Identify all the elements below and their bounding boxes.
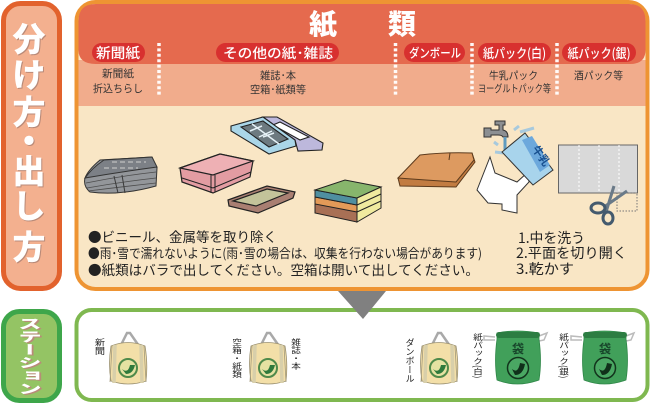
instructions	[88, 226, 482, 279]
illustration: bundled newspapers	[85, 157, 157, 193]
category: newspaper: 新聞紙	[96, 43, 140, 63]
illustration: divided box and lid	[231, 117, 323, 154]
category: newspaper: 折込ちらし	[93, 81, 143, 96]
bag: white cartons	[471, 331, 547, 384]
left pill: sorting and disposal heading: し	[12, 180, 46, 228]
bag: silver cartons: 紙パック(銀)	[557, 332, 571, 378]
illustration: pink box	[180, 154, 253, 193]
left pill: sorting and disposal heading: 方	[12, 221, 46, 269]
left pill: sorting and disposal heading: 出	[12, 145, 46, 193]
sack: newspaper: 新聞	[92, 338, 108, 356]
illustration: tap and milk carton: 牛乳	[529, 143, 553, 169]
title	[309, 3, 416, 43]
category: white cartons	[478, 43, 551, 96]
sack: cardboard	[404, 333, 458, 384]
instructions: ●ビニール、金属等を取り除く	[88, 226, 277, 246]
category: other paper and magazines: その他の紙･雑誌	[223, 42, 334, 62]
title: 紙	[309, 3, 337, 43]
sack: cardboard: ダンボール	[404, 337, 416, 383]
left pill: sorting and disposal heading: ・	[12, 115, 46, 163]
category: newspaper	[92, 43, 145, 96]
sack: newspaper	[92, 333, 147, 384]
category: silver cartons: 酒パック等	[574, 68, 623, 83]
carton steps: 1.中を洗う	[518, 228, 585, 248]
panel: station	[76, 310, 648, 400]
illustration: tap and milk carton	[477, 121, 553, 213]
carton steps	[516, 228, 627, 279]
instructions: ●雨･雪で濡れないように(雨･雪の場合は、収集を行わない場合があります)	[88, 243, 482, 262]
category: other paper and magazines: 空箱･紙類等	[250, 82, 306, 97]
illustration: stacked books	[315, 180, 381, 222]
carton steps: 2.平面を切り開く	[516, 243, 627, 263]
category: cardboard: ダンボール	[409, 42, 461, 62]
illustration: flattened cardboard	[398, 153, 475, 187]
category: other paper and magazines: 雑誌･本	[260, 68, 296, 83]
bag: silver cartons	[557, 331, 634, 384]
category: white cartons: 紙パック(白)	[483, 43, 546, 62]
sack: magazines and boxes	[230, 333, 303, 384]
title: 類	[388, 3, 416, 43]
instructions: ●紙類はバラで出してください。空箱は開いて出してください。	[88, 259, 479, 279]
sub-header light band	[78, 60, 646, 106]
left pill: sorting and disposal heading: け	[12, 49, 46, 97]
left pill: sorting and disposal heading: 分	[12, 13, 46, 61]
sack: magazines and boxes: 空箱・紙類	[230, 338, 244, 379]
illustration: opened carton and scissors	[558, 145, 638, 224]
category: white cartons: ヨーグルトパック等	[478, 81, 551, 96]
left pill: sorting and disposal heading	[4, 4, 60, 288]
header band	[78, 4, 646, 64]
sack: magazines and boxes: 雑誌・本	[289, 337, 303, 371]
illustration: flat box	[228, 186, 295, 213]
carton steps: 3.乾かす	[516, 259, 574, 279]
category: silver cartons	[562, 43, 636, 83]
arrow	[338, 291, 386, 319]
category: silver cartons: 紙パック(銀)	[568, 43, 630, 62]
left pill: station heading	[4, 312, 60, 400]
bag: white cartons: 紙パック(白)	[471, 332, 485, 378]
left pill: sorting and disposal heading: 方	[12, 86, 46, 134]
left pill: station heading: ステーション	[13, 317, 47, 395]
panel: paper category	[76, 2, 648, 289]
category: newspaper: 新聞紙	[102, 66, 135, 81]
category: white cartons: 牛乳パック	[489, 68, 538, 83]
category: other paper and magazines	[216, 42, 339, 97]
